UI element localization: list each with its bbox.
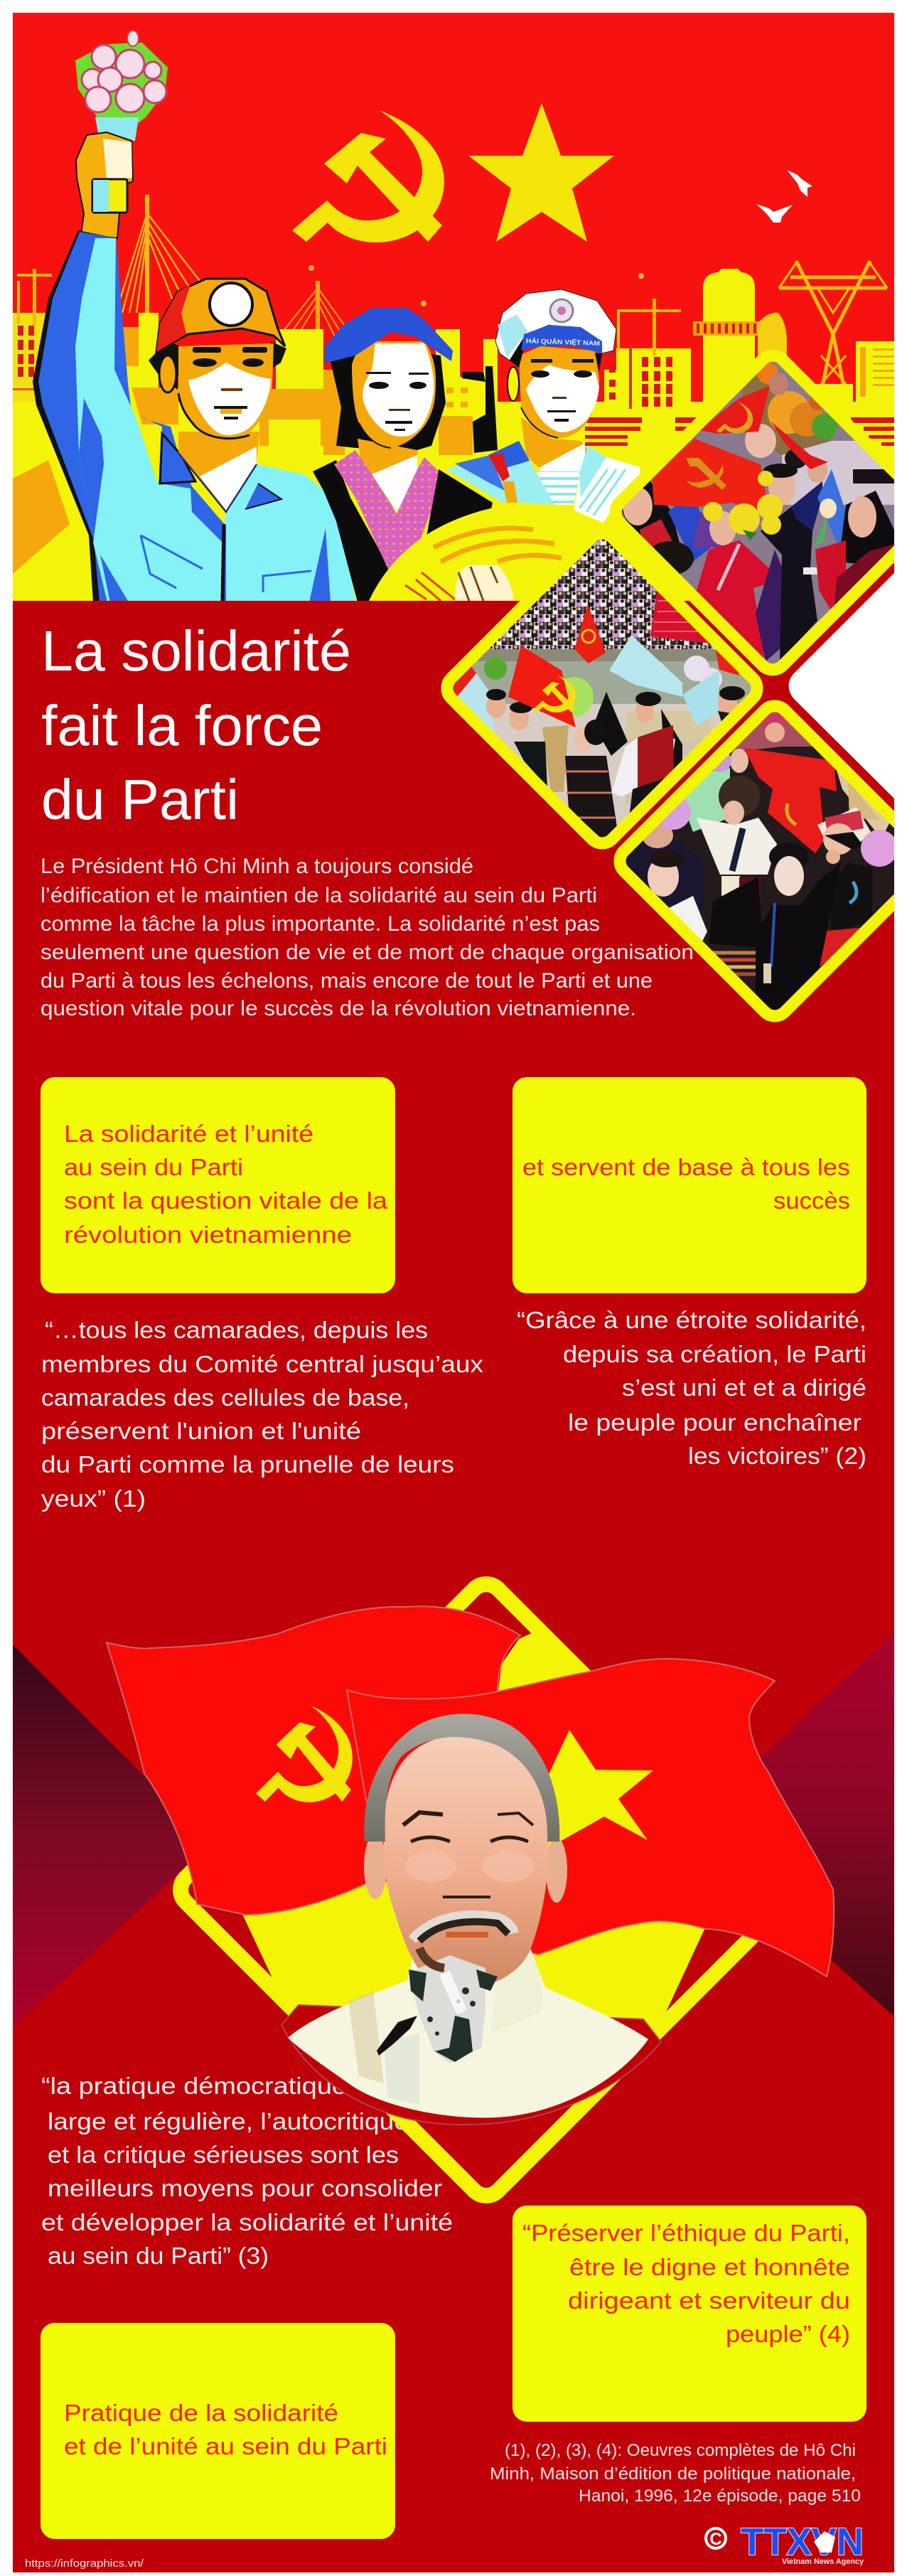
icon: star on flag <box>547 1730 653 1849</box>
quote 2: depuis sa création, le Parti <box>563 1341 866 1367</box>
intro paragraph: seulement une question de vie et de mort de chaque organisation <box>41 941 694 964</box>
callout box: vital question: révolution vietnamienne <box>64 1222 352 1248</box>
lower background: dark red page <box>13 601 894 2572</box>
illustration: ground colour bands <box>13 460 70 574</box>
head <box>149 343 181 390</box>
photo diamond: crowd marching with flags <box>441 539 763 849</box>
intro paragraph <box>41 855 694 1020</box>
quote 1: yeux” (1) <box>41 1485 146 1512</box>
callout box: preserve party ethics: dirigeant et serviteur du <box>568 2287 850 2314</box>
intro paragraph: comme la tâche la plus importante. La solidarité n’est pas <box>41 912 600 936</box>
quote 3 <box>41 2073 453 2269</box>
flag: Vietnamese national flag with star <box>347 1659 834 1977</box>
title: du Parti <box>41 768 239 831</box>
quote 3: et développer la solidarité et l’unité <box>41 2209 453 2235</box>
source url: https://infographics.vn/ <box>25 2558 144 2570</box>
raised hand <box>76 132 133 238</box>
quote 3: et la critique sérieuses sont les <box>48 2142 399 2168</box>
photo diamond: ethnic women in traditional dress <box>611 697 907 1024</box>
flags and roses <box>699 386 770 434</box>
callout box: basis of all successes: succès <box>773 1187 850 1214</box>
quote 1: du Parti comme la prunelle de leurs <box>41 1451 454 1477</box>
illustration: worker with raised bouquet <box>33 31 355 602</box>
title <box>41 619 351 831</box>
quote 3: “la pratique démocratique <box>41 2073 347 2099</box>
flag: Communist Party flag with hammer and sickle <box>107 1606 520 1915</box>
footnote source: (1), (2), (3), (4): Oeuvres complètes de Hô Chi <box>505 2441 856 2460</box>
illustration: conical hat held by woman <box>368 506 611 602</box>
icon: yellow star <box>468 103 614 242</box>
quote 2: “Grâce à une étroite solidarité, <box>517 1307 866 1333</box>
callout box: practice of solidarity <box>41 2323 395 2539</box>
logo: copyright and TTXVN: Vietnam News Agency <box>782 2558 864 2566</box>
skyline: left side with bridge <box>13 195 894 601</box>
footnote source: Minh, Maison d’édition de politique nationale, <box>490 2464 856 2484</box>
intro paragraph: du Parti à tous les échelons, mais encore de tout le Parti et une <box>41 969 653 993</box>
callout box: preserve party ethics: peuple” (4) <box>726 2321 850 2347</box>
intro paragraph: l’édification et le maintien de la solidarité au sein du Parti <box>41 884 597 907</box>
yellow fill pieces inside the diamond <box>242 1632 707 2055</box>
halo ellipse <box>281 2005 661 2125</box>
black dress <box>756 550 782 661</box>
icon: white doves <box>756 170 812 223</box>
callout box: vital question: La solidarité et l’unité <box>64 1121 313 1147</box>
left woman and flowers <box>626 838 704 912</box>
background wedges behind the flags <box>13 1632 894 2027</box>
white blouse woman <box>697 818 777 875</box>
title: fait la force <box>41 694 323 757</box>
beard <box>409 1915 514 2063</box>
icon: hammer and sickle <box>292 110 444 242</box>
callout box: vital question <box>41 1077 395 1293</box>
poster illustration: workers, flag symbols and skyline <box>13 13 894 602</box>
face <box>384 1735 549 1989</box>
callout box: preserve party ethics: être le digne et honnête <box>569 2254 850 2280</box>
quote 2 <box>517 1307 866 1469</box>
logo: copyright and TTXVN: TTXVN <box>741 2521 864 2563</box>
bouquet <box>75 31 168 141</box>
light blue flags <box>609 635 682 697</box>
left flag <box>458 667 495 734</box>
portrait: Hô Chi Minh <box>281 1714 661 2125</box>
hair <box>364 1714 559 1842</box>
intro paragraph: question vitale pour le succès de la révolution vietnamienne. <box>41 997 636 1020</box>
red flags <box>574 604 606 663</box>
quote 3: large et régulière, l’autocritique <box>48 2108 409 2134</box>
callout box: basis of all successes: et servent de base à tous les <box>522 1154 850 1180</box>
helmet <box>156 279 285 352</box>
quote 3: meilleurs moyens pour consolider <box>48 2175 442 2201</box>
quote 2: s’est uni et et a dirigé <box>622 1374 866 1401</box>
right woman <box>842 491 894 563</box>
title: La solidarité <box>41 619 351 683</box>
front woman in black <box>756 862 841 1024</box>
footnote source: Hanoi, 1996, 12e épisode, page 510 <box>579 2486 861 2506</box>
blue sleeve shadow and outline <box>33 230 109 601</box>
illustration: ethnic minority woman <box>313 308 493 602</box>
quote 3: au sein du Parti” (3) <box>48 2243 269 2269</box>
skyline: right side with tank and pylon <box>585 261 894 446</box>
red ao dai <box>694 540 770 666</box>
cyan shirt <box>75 238 355 602</box>
intro paragraph: Le Président Hô Chi Minh a toujours considé <box>41 855 473 878</box>
callout box: preserve party ethics <box>512 2206 866 2422</box>
red band and white notch at right edge <box>753 540 907 818</box>
black knot of shirt <box>377 2016 417 2056</box>
callout box: preserve party ethics: “Préserver l’éthique du Parti, <box>522 2220 850 2246</box>
callout box: practice of solidarity: Pratique de la solidarité <box>64 2400 338 2426</box>
quote 2: les victoires” (2) <box>688 1443 866 1469</box>
callout box: basis of all successes <box>512 1077 866 1293</box>
illustration: navy sailor with rifle <box>446 289 640 524</box>
large diamond outline behind the portrait <box>173 1577 799 2203</box>
left woman <box>621 481 680 543</box>
ears <box>364 1834 387 1899</box>
illustration: navy sailor with rifle: HẢI QUÂN VIỆT NAM <box>526 336 600 347</box>
callout box: vital question: sont la question vitale de la <box>64 1187 388 1214</box>
icon: hammer and sickle on flag <box>256 1706 353 1802</box>
neck <box>178 432 259 512</box>
callout box: vital question: au sein du Parti <box>64 1154 243 1180</box>
logo: copyright and TTXVN: C <box>709 2530 722 2549</box>
quote 1: membres du Comité central jusqu’aux <box>41 1351 484 1377</box>
quote 2: le peuple pour enchaîner <box>568 1409 862 1436</box>
shirt <box>288 1950 648 2117</box>
quote 1: “…tous les camarades, depuis les <box>45 1317 428 1343</box>
quote 1: préservent l'union et l'unité <box>41 1418 361 1444</box>
callout box: practice of solidarity: et de l’unité au sein du Parti <box>64 2433 387 2459</box>
right woman <box>817 807 871 846</box>
quote 1: camarades des cellules de base, <box>41 1384 409 1411</box>
people <box>514 742 547 787</box>
red flag <box>744 748 837 853</box>
footnote source <box>490 2441 861 2506</box>
brows and eyes <box>403 1812 533 1897</box>
photo diamond: women waving party flags <box>610 350 894 675</box>
quote 1 <box>41 1317 484 1512</box>
blue and rainbow fabric <box>817 469 845 543</box>
